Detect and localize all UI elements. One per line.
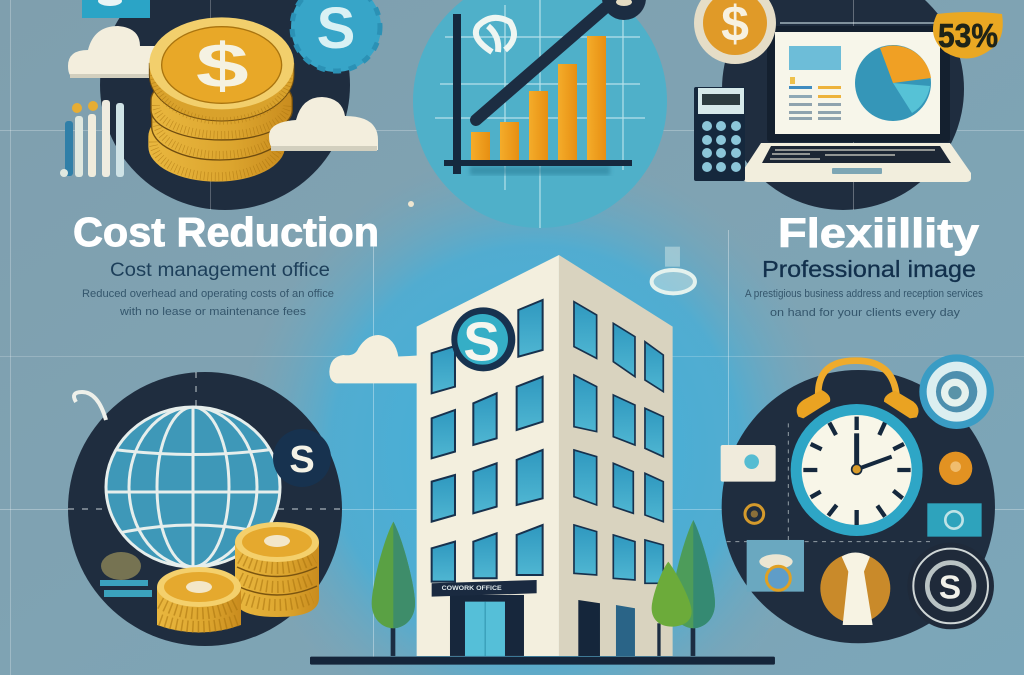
arrow: trend line: [476, 0, 646, 120]
text: flexibility description: A prestigious business address and reception services: [745, 288, 983, 300]
panel: global reach: [68, 372, 345, 646]
text: cost subtitle: Cost management office: [110, 260, 330, 281]
windows: left face: [432, 300, 543, 582]
text lines on the screen: [789, 77, 841, 120]
chart: rising bars: [471, 36, 606, 160]
logo: S badge: S: [463, 310, 500, 372]
icon: spiral dollar badge: S: [939, 569, 961, 606]
icon: spiral dollar badge: [907, 543, 994, 629]
icon: clock face: [791, 404, 923, 536]
logo: S badge: [451, 307, 515, 372]
chart: pie: [855, 45, 931, 121]
building walls: [417, 255, 673, 656]
icon: mini bar chart: [60, 100, 124, 177]
icon: left coin stack: [157, 567, 241, 632]
icon: right coin stack: [235, 522, 319, 617]
chart: bar shadow: [470, 166, 610, 175]
text: flexibility description: [745, 288, 983, 319]
text: flexibility description: on hand for your clients every day: [770, 307, 961, 319]
icon: laptop screen: [767, 26, 950, 142]
icon: gold coin stack: [148, 17, 294, 182]
panel: cost reduction coins: [60, 0, 381, 210]
entrance: [432, 580, 537, 656]
icon: white card: [721, 445, 776, 482]
icon: right cloud: [269, 97, 378, 151]
text: cost description: [82, 288, 334, 318]
tree: left: [372, 522, 415, 656]
text: flexibility subtitle: Professional image: [762, 256, 976, 282]
icon: small chart stack: [100, 552, 152, 597]
icon: dollar coin: [694, 0, 776, 64]
text: cost description: with no lease or maintenance fees: [119, 306, 307, 318]
illustration: central office building: [310, 247, 775, 665]
windows: right face: [574, 302, 663, 583]
icon: white wisp: [74, 392, 106, 420]
icon: screen thumbnail: [789, 46, 841, 70]
heading: Cost Reduction: Cost Reduction: [73, 209, 379, 255]
icon: left cloud: [68, 26, 155, 78]
icon: target badge: [919, 354, 994, 429]
panel: laptop and finance: [694, 0, 1003, 210]
icon: pale ring: [652, 247, 695, 293]
icon: calculator: [694, 87, 745, 181]
icon: wire globe: [100, 405, 290, 570]
icon: teal tag: [82, 0, 150, 18]
chart: axes: [444, 14, 632, 174]
text: cost description: Reduced overhead and operating costs of an office: [82, 288, 334, 300]
icon: white squiggle: [476, 18, 514, 52]
callout: percentage badge: 53%: [938, 17, 998, 54]
icon: orange dot: [939, 452, 972, 485]
icon: small ring: [745, 505, 764, 523]
door: side doors: [578, 600, 635, 656]
icon: teal card: [927, 503, 982, 537]
entrance: COWORK OFFICE: [442, 585, 502, 592]
icon: alarm clock bells: [797, 361, 919, 418]
icon: blue gear with S: [291, 0, 381, 72]
icon: tie medal: [820, 552, 890, 625]
icon: S badge: [273, 429, 331, 487]
tree: small: [652, 562, 692, 656]
panel: flexibility clock: [721, 354, 995, 643]
heading: Flexibility: Flexiillity: [778, 210, 979, 256]
tree: right: [672, 520, 715, 656]
icon: laptop keyboard base: [742, 143, 971, 182]
icon: gold coin stack: $: [196, 31, 249, 101]
ground line: [310, 657, 775, 665]
panel: growth chart circle: [413, 0, 667, 228]
icon: S badge: S: [289, 439, 315, 481]
icon: building cloud: [329, 335, 427, 383]
icon: hat card: [747, 540, 804, 592]
